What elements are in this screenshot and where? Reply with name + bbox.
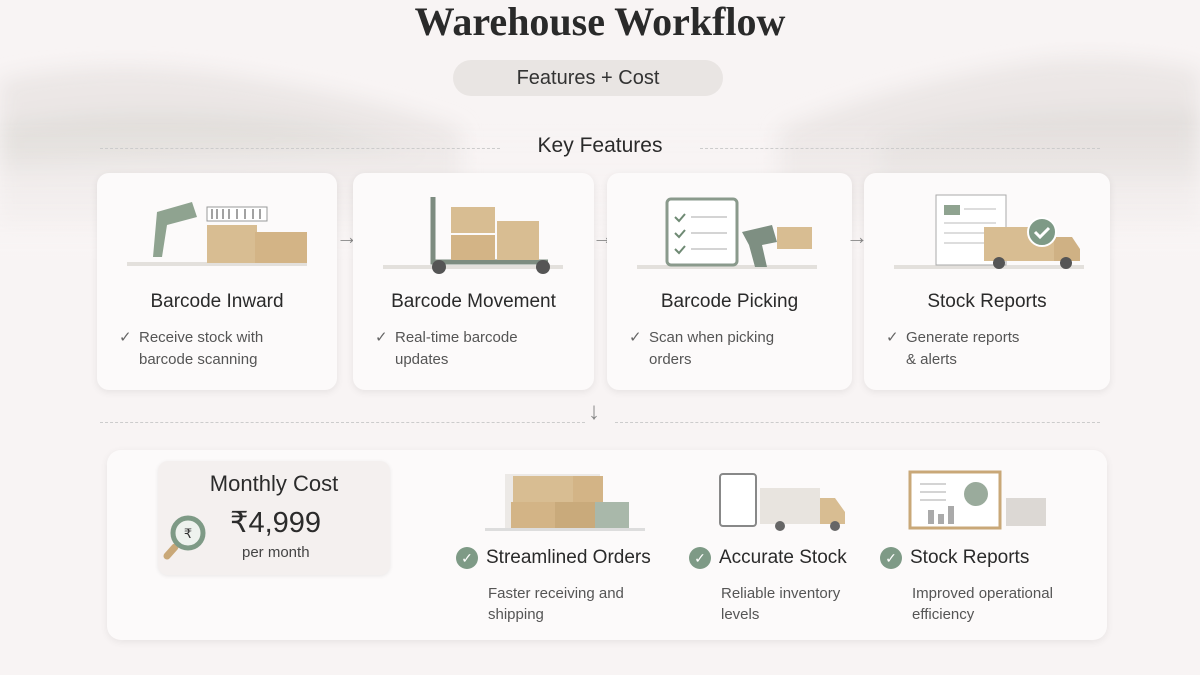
- benefit: streamlined orders: [456, 547, 651, 623]
- benefit: accurate stock: levels: [721, 606, 759, 623]
- cost box: per month: [242, 544, 310, 561]
- arrow: →: [846, 224, 868, 249]
- background hills: [0, 61, 1200, 192]
- icon: hand truck with boxes: [383, 197, 563, 274]
- card: barcode picking: [607, 173, 852, 390]
- benefit: stock reports: ✓: [885, 550, 897, 566]
- card: barcode picking: Barcode Picking: [661, 291, 798, 312]
- card: barcode movement: Barcode Movement: [391, 291, 556, 312]
- card: stock reports: & alerts: [906, 351, 957, 368]
- down arrow: ↓: [588, 398, 600, 425]
- icon: rupee magnifier: ₹: [184, 526, 192, 541]
- title: Warehouse Workflow: [415, 0, 785, 44]
- benefit: streamlined orders: Streamlined Orders: [486, 547, 651, 568]
- panel: cost and benefits: [107, 450, 1107, 640]
- arrow: →: [336, 224, 358, 249]
- card: barcode movement: Real-time barcode updates: [395, 329, 518, 368]
- icon: clipboard and scanner: [637, 198, 817, 269]
- card: barcode movement: [353, 173, 594, 390]
- benefit: streamlined orders: Faster receiving and shipping: [488, 585, 624, 623]
- card: barcode picking: Scan when picking orders: [649, 329, 774, 368]
- card: barcode inward: Barcode Inward: [150, 291, 284, 312]
- icon: dashboard report: [908, 470, 1046, 530]
- icon: report and truck: [894, 194, 1084, 269]
- benefit: accurate stock: Reliable inventory: [721, 585, 840, 602]
- card: stock reports: Generate reports: [906, 329, 1019, 346]
- arrow: →: [592, 224, 614, 249]
- benefit: accurate stock: ✓: [694, 550, 706, 566]
- card: barcode inward: Receive stock with barcode scanning: [139, 329, 263, 368]
- cost box: Monthly Cost: [210, 471, 338, 496]
- icon: boxes: [485, 474, 645, 531]
- benefit: stock reports: [880, 547, 1053, 623]
- icon: scanner and box: [127, 202, 307, 266]
- icon: tablet and truck: [719, 473, 845, 531]
- cost box: [158, 461, 390, 575]
- subtitle pill: [453, 60, 723, 96]
- benefit: streamlined orders: ✓: [461, 550, 473, 566]
- card: barcode inward: [97, 173, 337, 390]
- subtitle pill: Features + Cost: [517, 67, 659, 89]
- cost box: ₹4,999: [230, 507, 321, 539]
- section heading: key features: Key Features: [538, 134, 662, 157]
- benefit: accurate stock: Accurate Stock: [719, 547, 847, 568]
- benefit: stock reports: Stock Reports: [910, 547, 1029, 568]
- icon: rupee magnifier: [164, 516, 206, 560]
- card: stock reports: Stock Reports: [927, 291, 1047, 312]
- card: stock reports: [864, 173, 1110, 390]
- benefit: stock reports: Improved operational efficiency: [912, 585, 1053, 623]
- benefit: accurate stock: [689, 547, 847, 623]
